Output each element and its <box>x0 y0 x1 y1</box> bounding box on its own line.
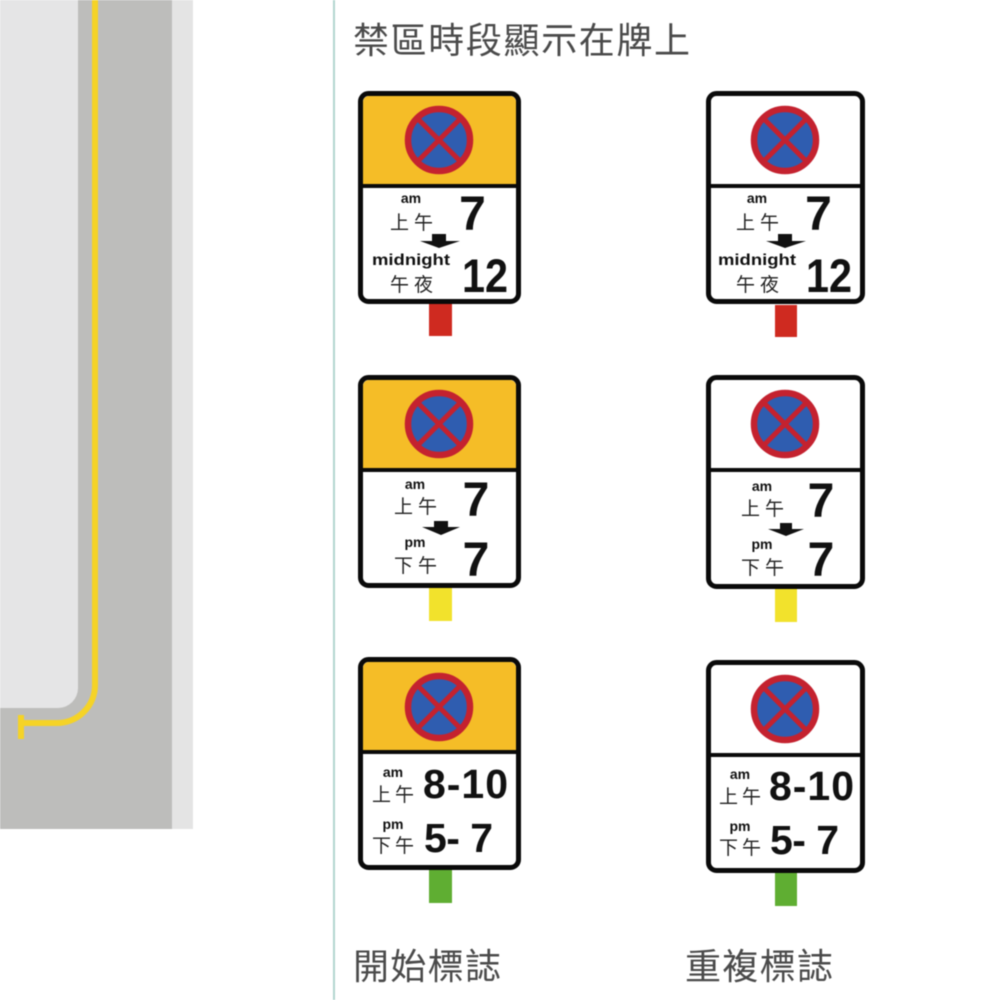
time text: 上午 <box>741 498 784 520</box>
icon: no stopping <box>754 393 816 455</box>
sign: start sign, 7am to 7pm <box>360 378 518 587</box>
time text: midnight <box>718 252 797 269</box>
time text <box>372 761 508 861</box>
time text: am <box>401 190 421 206</box>
icon: no stopping <box>408 393 470 455</box>
label: start sign: 開始標誌 <box>353 946 501 987</box>
icon: no stopping <box>754 678 816 740</box>
sign: start sign, am 8-10 and pm 5-7 <box>360 660 518 868</box>
post mark: green <box>775 873 797 906</box>
time text: am <box>747 190 767 206</box>
time text: 5- 7 <box>770 817 839 863</box>
time text: 下午 <box>394 555 437 577</box>
sign: repeat sign, 7am to 7pm <box>708 378 862 587</box>
icon: no stopping <box>408 676 470 738</box>
time text: 上午 <box>372 784 414 806</box>
time text: midnight <box>372 252 451 269</box>
yellow kerb line <box>21 0 95 739</box>
time text: 7 <box>808 534 834 587</box>
time text: 7 <box>463 474 489 527</box>
post mark: red <box>429 304 452 336</box>
label: repeat sign: 重複標誌 <box>685 946 833 987</box>
time text: 午夜 <box>736 274 779 296</box>
time text: am <box>730 766 750 782</box>
time text: 5- 7 <box>424 815 493 861</box>
time text <box>741 475 834 587</box>
time text <box>719 763 854 863</box>
time text: 12 <box>462 249 508 302</box>
time text: 上午 <box>394 496 437 518</box>
time text: 7 <box>459 188 486 241</box>
time text: 午夜 <box>390 274 433 296</box>
time text: 上午 <box>736 212 779 234</box>
time text: pm <box>752 536 772 552</box>
time text <box>394 474 489 587</box>
time text <box>372 188 508 302</box>
time text: 上午 <box>719 786 761 808</box>
sign: repeat sign, am 8-10 and pm 5-7 <box>708 662 862 870</box>
time text: am <box>383 764 403 780</box>
time text: 下午 <box>741 557 784 579</box>
panel divider line <box>333 0 335 1000</box>
road diagram <box>0 0 193 829</box>
time text: 下午 <box>719 837 761 859</box>
sign: repeat sign, 7am to midnight <box>708 94 862 302</box>
time text: 上午 <box>390 212 433 234</box>
time text: 12 <box>806 249 852 302</box>
post mark: yellow <box>429 588 452 621</box>
time text: am <box>752 478 772 494</box>
icon: no stopping <box>754 109 816 171</box>
time text: 下午 <box>372 835 414 857</box>
time text: 7 <box>463 534 489 587</box>
sign: start sign, 7am to midnight <box>360 94 518 302</box>
time text: 7 <box>805 188 832 241</box>
icon: no stopping <box>408 109 470 171</box>
time text: am <box>405 476 425 492</box>
time text: 7 <box>808 475 834 528</box>
time text: pm <box>382 816 404 832</box>
post mark: red <box>775 305 797 337</box>
time text: pm <box>730 818 750 834</box>
time text: 8-10 <box>769 763 854 809</box>
time text <box>718 188 852 302</box>
post mark: green <box>429 870 452 903</box>
heading: 禁區時段顯示在牌上 <box>353 20 690 61</box>
time text: 8-10 <box>423 761 508 807</box>
post mark: yellow <box>775 589 797 622</box>
time text: pm <box>404 534 426 550</box>
